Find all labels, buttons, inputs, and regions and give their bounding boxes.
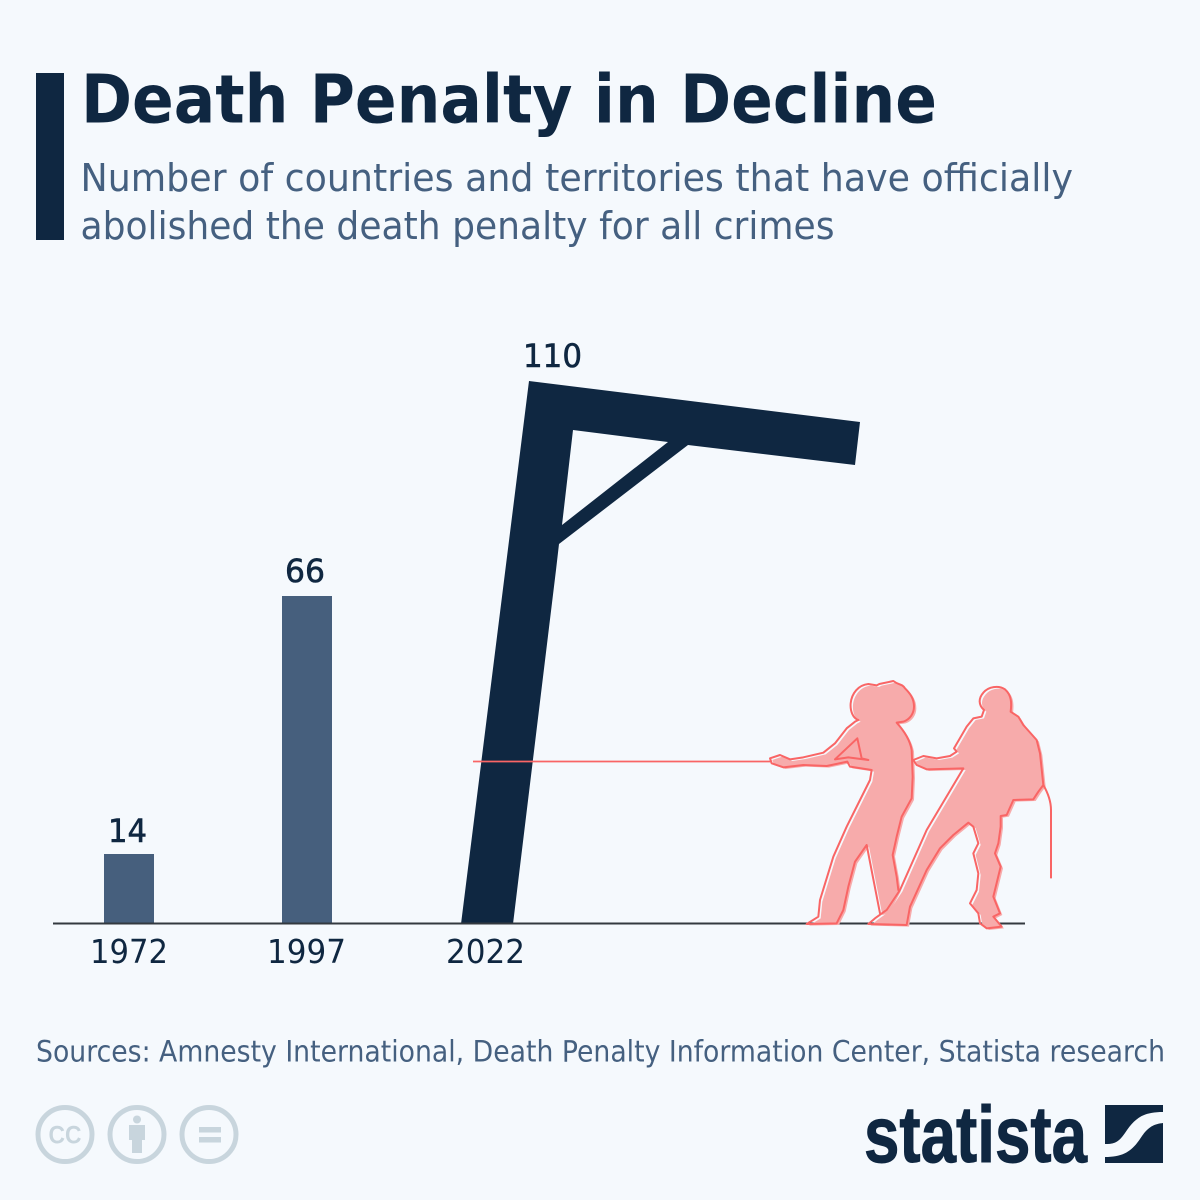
subtitle: Number of countries and territories that have officially xyxy=(80,156,1073,200)
statista logo: statista xyxy=(864,1090,1087,1179)
icon: creative commons: CC xyxy=(48,1122,82,1150)
icon: no derivatives xyxy=(182,1108,236,1162)
figure: rear person xyxy=(868,687,1046,930)
illustration: people pulling the rope xyxy=(770,681,1051,930)
bar: 1972 xyxy=(104,854,154,924)
figure: front person xyxy=(770,681,916,926)
title accent bar xyxy=(36,73,64,240)
gallows bar: 2022 xyxy=(461,381,860,924)
year labels: 2022 xyxy=(446,932,525,971)
value labels xyxy=(108,337,582,850)
axis line xyxy=(53,922,1025,924)
value labels: 110 xyxy=(523,337,582,375)
year labels: 1997 xyxy=(267,932,346,971)
subtitle xyxy=(80,156,1073,248)
title: Death Penalty in Decline xyxy=(81,60,937,138)
icon: statista mark xyxy=(1105,1105,1163,1163)
rope xyxy=(473,760,772,762)
value labels: 66 xyxy=(285,552,325,590)
year labels: 1972 xyxy=(90,932,168,971)
subtitle: abolished the death penalty for all crimes xyxy=(80,204,834,248)
rope tail xyxy=(1043,785,1051,878)
icon: attribution xyxy=(110,1108,164,1162)
icon: creative commons xyxy=(38,1108,92,1162)
year labels xyxy=(90,932,525,971)
value labels: 14 xyxy=(108,812,147,850)
bar: 1997 xyxy=(282,596,332,924)
